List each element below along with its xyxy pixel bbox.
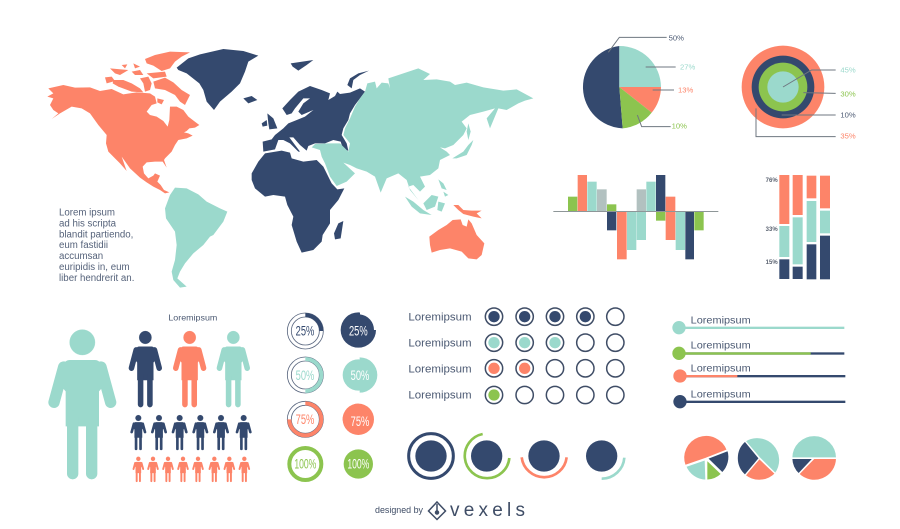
100% ring [289, 448, 321, 480]
Greenland and Iceland [177, 49, 258, 110]
stacked bar labels [766, 178, 778, 266]
pie labels: 10% [672, 122, 687, 131]
pie labels: 13% [678, 86, 694, 95]
slider two: Loremipsum [691, 341, 751, 352]
rating rings [485, 308, 624, 404]
Australia and New Guinea [429, 205, 484, 259]
rating fills [488, 311, 591, 401]
stacked bar labels: 15% [766, 260, 778, 266]
dot rating matrix [408, 308, 624, 404]
50% ring: 50% [296, 368, 314, 383]
slider bars [672, 315, 845, 408]
25% disc [341, 311, 378, 348]
100% ring: 100% [294, 457, 316, 472]
large figure [54, 330, 111, 474]
rating row labels [408, 312, 472, 402]
rating row labels: Loremipsum [408, 312, 472, 324]
ring labels: 10% [840, 110, 856, 119]
25% ring: 25% [296, 324, 314, 339]
pie three [792, 435, 837, 480]
coral arc badge [522, 440, 567, 477]
75% disc [343, 404, 374, 435]
rating row labels: Loremipsum [408, 364, 472, 376]
pie chart with callouts [583, 34, 696, 131]
50% disc [343, 357, 377, 393]
25% disc: 25% [349, 324, 368, 339]
map text block: accumsan [59, 251, 103, 262]
stacked bar labels: 76% [766, 178, 778, 184]
map text block: blandit partiendo, [59, 229, 133, 240]
75% ring: 75% [296, 412, 314, 427]
stacked bar chart [766, 175, 830, 279]
heading: Loremipsum [168, 314, 218, 323]
100% disc: 100% [347, 457, 369, 472]
100% disc [344, 449, 373, 479]
map text block: liber hendrerit an. [59, 273, 134, 284]
designed by text: designed by [375, 505, 423, 515]
map text block: ad his scripta [59, 218, 117, 229]
diverging bar chart [553, 175, 718, 259]
row of coral figures [134, 457, 249, 481]
slider one: Loremipsum [691, 315, 751, 326]
leader lines [608, 37, 676, 127]
circular progress badges [409, 434, 624, 479]
row of navy figures [132, 415, 250, 449]
slider four: Loremipsum [691, 390, 751, 401]
slider four [673, 390, 845, 408]
pie labels: 50% [669, 34, 684, 43]
teal arc badge [586, 440, 624, 479]
75% ring [287, 401, 323, 437]
Europe and Africa [252, 60, 369, 253]
ring leader lines [756, 70, 836, 137]
slider three [673, 363, 845, 383]
vexels wordmark: vexels [450, 500, 525, 521]
pie labels [669, 34, 696, 131]
ring labels [840, 66, 856, 140]
people pictograms [54, 314, 250, 481]
25% ring [287, 313, 323, 349]
stacked bar labels: 33% [766, 227, 778, 233]
pie one [684, 435, 729, 480]
50% ring [287, 357, 323, 393]
green arc badge [465, 434, 509, 478]
rating row labels: Loremipsum [408, 337, 472, 349]
slider three: Loremipsum [691, 363, 751, 374]
full ring badge [409, 434, 453, 478]
North America [47, 52, 199, 193]
pie labels: 27% [680, 63, 696, 72]
ring labels: 45% [840, 66, 856, 75]
world map [47, 49, 533, 288]
ring labels: 35% [840, 131, 856, 140]
three medium figures [131, 331, 247, 404]
slider two [672, 341, 844, 360]
vexels credit [375, 500, 525, 521]
rating row labels: Loremipsum [408, 390, 472, 402]
pie slices [583, 46, 661, 128]
slider one [672, 315, 844, 334]
map text block: eum fastidii [59, 240, 108, 251]
50% disc: 50% [351, 368, 369, 383]
75% disc: 75% [351, 414, 369, 429]
pie two [737, 437, 780, 480]
ring labels: 30% [840, 89, 856, 98]
percentage rings and discs [287, 311, 378, 480]
rings [742, 46, 824, 128]
concentric ring chart with callouts [742, 46, 856, 140]
icon: vexels diamond [428, 502, 446, 520]
Asia [312, 68, 533, 215]
small pie charts [684, 435, 837, 480]
map text block: Lorem ipsum [59, 208, 115, 218]
map text block: euripidis in, eum [59, 262, 130, 273]
South America [165, 188, 227, 288]
